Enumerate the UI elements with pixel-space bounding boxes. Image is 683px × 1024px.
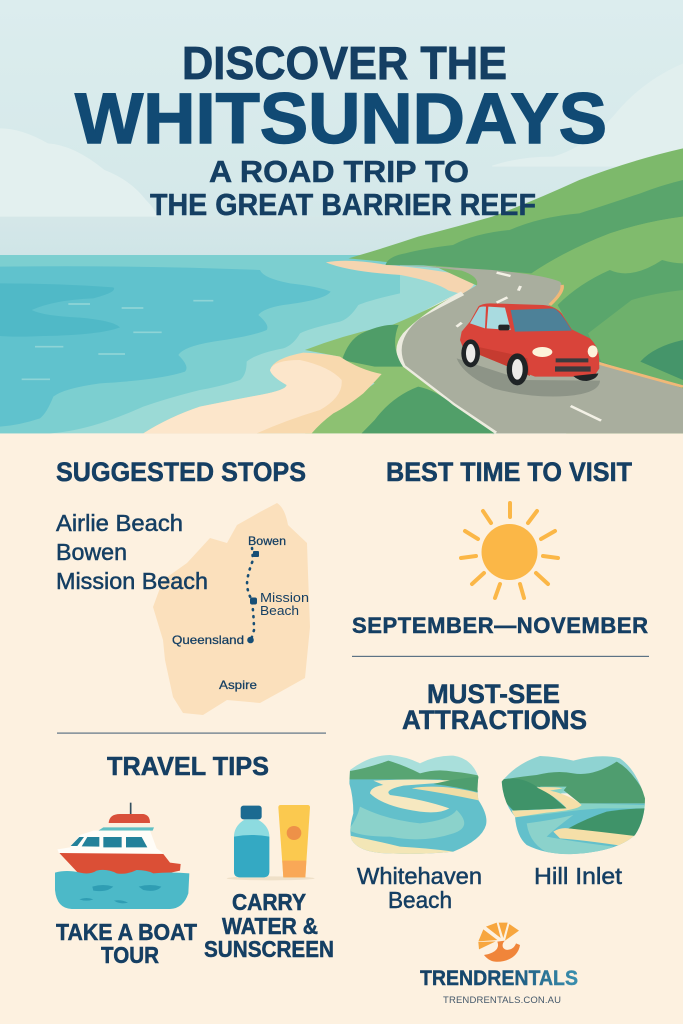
windows (71, 837, 147, 847)
cloud left (0, 128, 158, 217)
headland lower shade (362, 387, 494, 433)
grille (555, 358, 591, 372)
sea (0, 255, 683, 433)
subtitle line 2: THE GREAT BARRIER REEF (150, 187, 536, 222)
water (55, 870, 189, 909)
sand ribbon (512, 787, 582, 817)
map label: Bowen: Bowen (248, 534, 286, 548)
lower sand (553, 828, 635, 846)
bottle cap (241, 806, 262, 819)
stop list (56, 510, 208, 594)
tip: water and sunscreen: WATER & (222, 913, 318, 939)
water (349, 779, 486, 854)
heading: travel tips: TRAVEL TIPS (107, 751, 269, 781)
heading: suggested stops: SUGGESTED STOPS (56, 457, 306, 487)
far wheel (573, 373, 598, 381)
panel: hero coastal road illustration (0, 0, 683, 433)
panel: suggested stops (56, 457, 310, 715)
label: Hill Inlet: Hill Inlet (534, 863, 623, 889)
panel: best time to visit (352, 457, 648, 638)
label: Whitehaven Beach: Beach (388, 887, 452, 913)
panel: must-see attractions (340, 679, 650, 913)
bottom sand (350, 836, 453, 854)
cloud right (492, 63, 683, 167)
dark patches (0, 283, 120, 337)
dates: SEPTEMBER—NOVEMBER (352, 613, 648, 638)
body lower shade (477, 347, 530, 376)
icon: water bottle and sunscreen (227, 805, 315, 880)
cabin (57, 831, 163, 854)
marker: Queensland (247, 637, 254, 643)
logo: TrendRentals (420, 923, 578, 1006)
illustration: Whitehaven Beach (349, 755, 486, 854)
map label: Queensland: Queensland (172, 633, 244, 647)
headlight left (532, 347, 552, 357)
lower hill (568, 808, 648, 837)
bottle water (234, 835, 269, 877)
light water swirl (527, 815, 613, 855)
lower green headland (305, 295, 494, 433)
sun disc (482, 524, 538, 580)
tip: water and sunscreen: CARRY (232, 889, 306, 915)
label: Whitehaven Beach: Whitehaven (357, 863, 482, 889)
right hill (531, 217, 683, 392)
front wheel (507, 353, 528, 385)
right hill deep shade (640, 340, 683, 380)
road (383, 265, 683, 433)
sun rays (478, 923, 519, 949)
windshield (511, 308, 572, 332)
bottle glass (234, 819, 269, 877)
water (506, 803, 645, 854)
stop: Airlie Beach: Airlie Beach (56, 510, 183, 536)
rear hub (466, 344, 475, 363)
inlet channel (512, 787, 647, 817)
front hub (512, 359, 523, 380)
heading: must-see attractions: MUST-SEE (427, 679, 560, 709)
panel: travel tips (55, 751, 334, 968)
headlight right (588, 345, 598, 357)
beach inner sand (143, 360, 342, 433)
map label: Mission Beach: Beach (260, 603, 299, 618)
headland shade (342, 325, 403, 367)
stop: Bowen: Bowen (56, 539, 127, 565)
sunscreen tube (278, 805, 310, 877)
mirror (498, 325, 510, 330)
side window front (487, 307, 511, 330)
road white edge (399, 293, 495, 433)
map of Queensland (153, 503, 310, 715)
back hills (500, 762, 650, 803)
tip: boat tour: TOUR (101, 942, 159, 968)
map label: Mission Beach: Mission (260, 590, 309, 605)
illustration: Hill Inlet (502, 756, 645, 854)
marker: Bowen (253, 551, 259, 557)
right sand (412, 787, 480, 801)
map label: Aspire: Aspire (219, 678, 257, 692)
beach outer sand (143, 353, 382, 433)
dotted route (247, 548, 254, 640)
marker: Mission Beach (250, 598, 257, 604)
light water (348, 807, 464, 839)
sun rays (461, 503, 558, 598)
icon: boat (55, 803, 189, 909)
car body (460, 303, 599, 377)
tube emblem (287, 826, 301, 840)
deep water (0, 266, 331, 427)
main hill (348, 148, 683, 433)
icon: sun (461, 503, 558, 598)
ground shadow (227, 876, 315, 880)
hills (347, 761, 483, 793)
title (75, 37, 607, 222)
sky (0, 0, 683, 220)
heading: must-see attractions: ATTRACTIONS (402, 705, 587, 735)
right hill mid shade (588, 290, 683, 390)
sand bar (370, 780, 450, 812)
mid water (0, 255, 400, 433)
side window rear (470, 306, 486, 328)
stop: Mission Beach: Mission Beach (56, 568, 208, 594)
left hill (500, 778, 567, 811)
mast (128, 803, 133, 815)
thin beach (326, 261, 474, 294)
sky (502, 756, 644, 794)
road orange verge (550, 285, 683, 387)
hull (59, 853, 181, 875)
logo wordmark: TRENDRENTALS (420, 967, 578, 990)
title line: discover the: DISCOVER THE (182, 37, 507, 89)
rear wheel (461, 339, 480, 367)
fish (79, 885, 161, 903)
sky (350, 755, 478, 784)
subtitle line 1: A ROAD TRIP TO (209, 154, 469, 189)
shallow water base (0, 255, 683, 433)
heading: best time to visit: BEST TIME TO VISIT (386, 457, 632, 487)
sparkles (22, 301, 213, 379)
right hill (433, 777, 480, 793)
crescent (484, 941, 520, 962)
tip: boat tour: TAKE A BOAT (56, 919, 197, 945)
icon: red car (457, 303, 600, 396)
dark hill layer (386, 180, 683, 273)
right hill shadow (558, 260, 683, 390)
logo mark (478, 923, 520, 962)
logo url: TRENDRENTALS.CON.AU (443, 995, 561, 1006)
horizon haze (0, 217, 683, 255)
roof (98, 827, 154, 831)
wide beach (143, 353, 382, 433)
road dashes (457, 273, 601, 421)
top canopy (109, 814, 150, 823)
tube base (282, 861, 306, 877)
car shadow (457, 358, 600, 396)
tip: water and sunscreen: SUNSCREEN (204, 936, 334, 962)
title line: whitsundays: WHITSUNDAYS (75, 80, 607, 159)
